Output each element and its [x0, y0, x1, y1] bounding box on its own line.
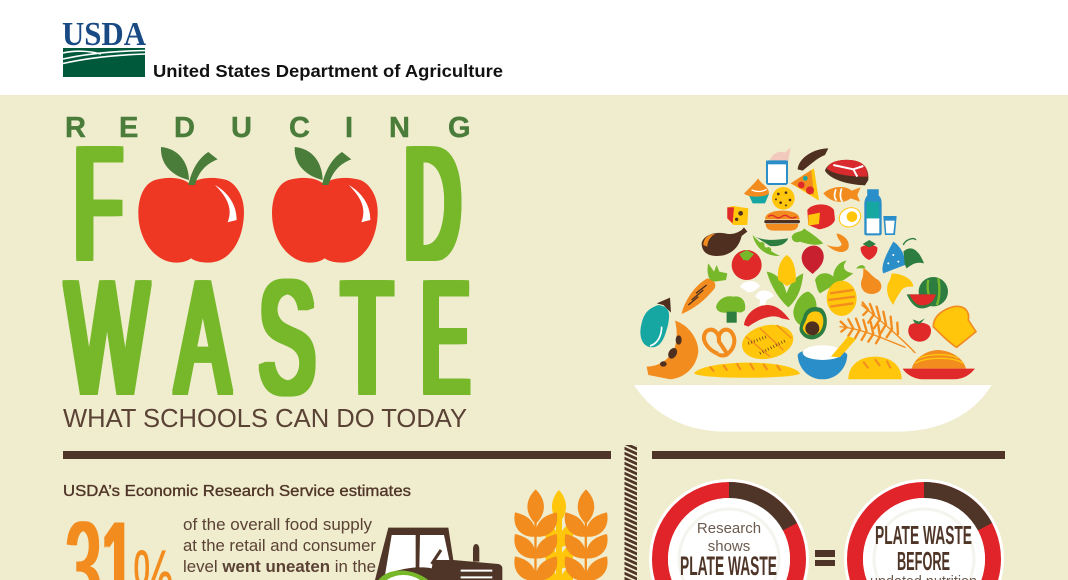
letter F: F — [75, 114, 121, 294]
letter E: E — [422, 248, 469, 428]
line one: of the overall food supply — [183, 516, 373, 534]
divider: vertical rope — [624, 445, 637, 580]
watermelon — [907, 277, 948, 308]
plate label small: Research — [697, 520, 761, 537]
estimate text — [183, 516, 377, 576]
radish — [792, 228, 824, 274]
icon: apple two — [272, 147, 378, 263]
broccoli — [716, 296, 745, 323]
red pepper — [744, 305, 790, 327]
eggplant — [640, 298, 671, 347]
pineapple — [815, 261, 857, 316]
pear — [856, 265, 881, 294]
steak — [825, 160, 868, 185]
plate rim — [844, 479, 1004, 580]
right orange stalk — [565, 489, 608, 580]
food pyramid illustration — [634, 147, 992, 432]
USDA logo — [62, 16, 146, 77]
bread loaf — [848, 357, 902, 379]
wheat stalks — [840, 303, 915, 353]
letter W: W — [66, 248, 148, 428]
letter D: D — [405, 114, 460, 294]
avocado — [793, 292, 827, 339]
yogurt — [766, 147, 791, 184]
peas — [753, 235, 788, 256]
fish — [823, 187, 861, 202]
logo wordmark: USDA — [62, 16, 146, 53]
croissant — [647, 321, 698, 379]
braided bread — [739, 320, 797, 364]
agency name: United States Department of Agriculture — [153, 61, 503, 81]
baguette — [694, 363, 800, 378]
toast — [933, 306, 976, 347]
cookie — [772, 187, 795, 210]
plate centre — [863, 498, 985, 580]
plate heading one: PLATE WASTE — [875, 520, 972, 550]
rice bowl — [798, 336, 856, 379]
plate — [634, 385, 992, 432]
plate chart: before — [844, 479, 1004, 580]
milk glass — [883, 216, 897, 235]
title: reducing: REDUCING — [65, 112, 471, 144]
left orange stalk — [514, 489, 557, 580]
header band — [0, 0, 1068, 95]
icon: wheat — [514, 489, 608, 580]
divider: right — [652, 451, 1005, 459]
subtitle: WHAT SCHOOLS CAN DO TODAY — [63, 405, 467, 433]
burger — [764, 211, 800, 231]
shrimp — [827, 233, 849, 252]
cheese wedge — [727, 206, 748, 225]
letter T: T — [343, 248, 392, 428]
line three: level went uneaten in the — [183, 558, 376, 576]
tomato — [732, 250, 762, 280]
pasta plate — [903, 350, 975, 379]
cheese round — [807, 204, 835, 229]
grapes — [882, 239, 924, 273]
pizza — [791, 168, 819, 201]
letter A: A — [176, 248, 229, 428]
small apple — [908, 318, 931, 342]
sausage — [798, 148, 828, 171]
egg — [836, 204, 864, 230]
banana — [887, 273, 913, 305]
mushrooms — [740, 281, 774, 305]
line two: at the retail and consumer — [183, 537, 377, 555]
plate chart: research shows — [649, 479, 809, 580]
carrot — [682, 263, 727, 314]
red ring — [855, 490, 993, 580]
icon: apple one — [138, 147, 244, 263]
logo landscape — [63, 48, 145, 77]
plate chart: research shows: shows — [708, 538, 750, 555]
corn — [767, 255, 803, 307]
yellow centre stalk — [544, 490, 574, 580]
plate rim — [649, 479, 809, 580]
cupcake — [744, 178, 769, 203]
title: apple letters — [138, 147, 378, 263]
letter S: S — [259, 248, 315, 428]
icon: tractor — [375, 528, 502, 580]
milk bottle — [864, 189, 882, 235]
brown segment — [924, 482, 992, 559]
chicken — [702, 227, 747, 256]
pretzel — [704, 330, 734, 355]
plate chart: before: BEFORE — [897, 546, 950, 576]
strawberry — [861, 240, 877, 260]
estimate heading: USDA’s Economic Research Service estimates — [63, 483, 411, 500]
brown segment — [729, 482, 797, 559]
red ring — [660, 490, 798, 580]
divider: left — [63, 451, 611, 459]
equals sign — [815, 550, 835, 566]
plate centre — [668, 498, 790, 580]
